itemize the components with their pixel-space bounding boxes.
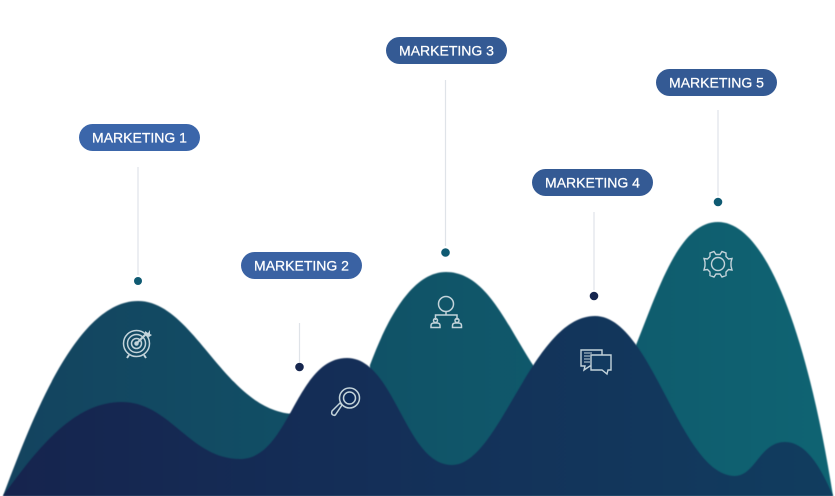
back mountain range bbox=[3, 222, 833, 496]
label: Marketing 2: MARKETING 2 bbox=[254, 258, 349, 274]
icon: magnifier bbox=[332, 388, 360, 415]
label: Marketing 4: MARKETING 4 bbox=[545, 174, 640, 190]
marker 3: line and dot bbox=[441, 80, 450, 257]
marker 5: line and dot bbox=[714, 110, 722, 206]
icon: target bbox=[124, 330, 152, 358]
front mountain range bbox=[3, 316, 833, 496]
marker 2: line and dot bbox=[295, 323, 304, 371]
icon: speech bubbles bbox=[581, 350, 611, 374]
label: Marketing 1: MARKETING 1 bbox=[92, 130, 187, 146]
label: Marketing 4 bbox=[532, 169, 653, 196]
label: Marketing 3: MARKETING 3 bbox=[399, 42, 494, 58]
label: Marketing 5: MARKETING 5 bbox=[669, 74, 764, 90]
marker 1: line and dot bbox=[134, 167, 142, 285]
label: Marketing 1 bbox=[79, 124, 200, 151]
label: Marketing 5 bbox=[656, 69, 777, 96]
icon: hierarchy bbox=[431, 296, 462, 328]
marker 4: line and dot bbox=[590, 212, 598, 300]
label: Marketing 3 bbox=[386, 37, 507, 64]
icon: gear bbox=[704, 252, 732, 277]
label: Marketing 2 bbox=[241, 252, 362, 279]
